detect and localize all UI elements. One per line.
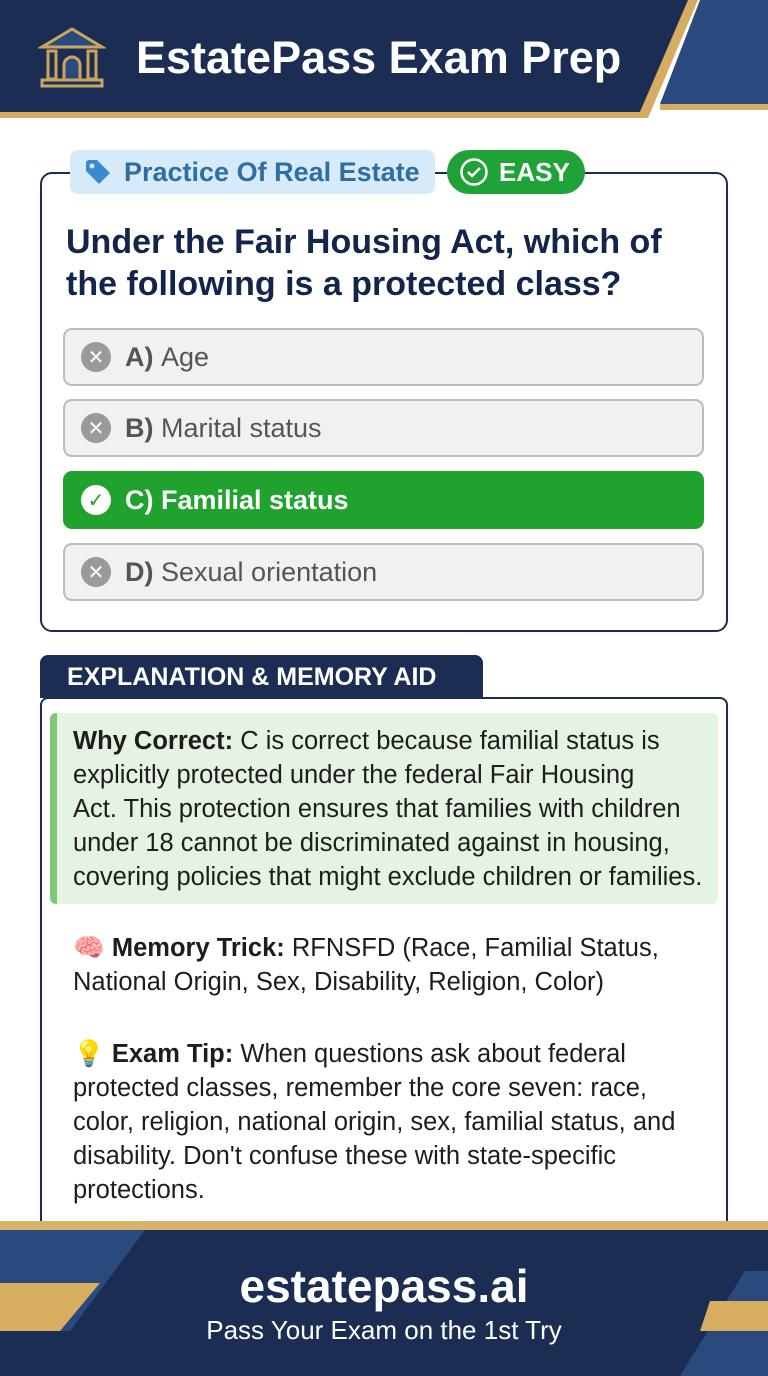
tag: category: Practice Of Real Estate (124, 156, 420, 186)
explanation panel (40, 697, 728, 1237)
why correct box: Why Correct: C is correct because familial status is (73, 727, 660, 755)
footer banner (0, 1221, 768, 1376)
tag: difficulty: EASY (499, 156, 570, 186)
why correct box: covering policies that might exclude children or families. (73, 863, 702, 891)
option A: A) (125, 342, 154, 372)
header banner (0, 0, 768, 118)
footer brand: estatepass.ai (240, 1260, 528, 1312)
exam tip (73, 1039, 675, 1204)
explanation heading tab: EXPLANATION & MEMORY AID (67, 663, 436, 691)
title: EstatePass Exam Prep (136, 32, 621, 83)
option B (63, 399, 704, 457)
why correct box: explicitly protected under the federal Fair Housing (73, 761, 634, 789)
memory trick (73, 934, 659, 996)
option C correct (63, 471, 704, 529)
option A: Age (161, 342, 209, 372)
exam tip: disability. Don't confuse these with state-specific (73, 1142, 616, 1170)
exam tip: 💡 Exam Tip: When questions ask about federal (73, 1040, 626, 1068)
question text: Under the Fair Housing Act, which of the following is a protected class? (66, 223, 662, 303)
question card (40, 172, 728, 632)
tag: difficulty (447, 150, 585, 194)
option D: Sexual orientation (161, 556, 377, 586)
option C correct: ✓ (88, 490, 104, 512)
option D (63, 543, 704, 601)
tag: category (70, 150, 435, 194)
why correct box: under 18 cannot be discriminated against in housing, (73, 829, 670, 857)
option B: B) (125, 412, 154, 442)
memory trick: 🧠 Memory Trick: RFNSFD (Race, Familial Status, (73, 934, 659, 962)
why correct box (50, 713, 718, 904)
explanation heading tab (40, 655, 483, 698)
memory trick: National Origin, Sex, Disability, Religion, Color) (73, 968, 604, 996)
exam tip: color, religion, national origin, sex, familial status, and (73, 1108, 675, 1136)
option D: ✕ (88, 562, 104, 584)
footer tagline: Pass Your Exam on the 1st Try (206, 1315, 562, 1345)
icon: building (38, 27, 106, 88)
option A (63, 328, 704, 386)
exam tip: protected classes, remember the core seven: race, (73, 1074, 647, 1102)
option A: ✕ (88, 346, 104, 368)
exam tip: protections. (73, 1176, 205, 1204)
option C correct: C) Familial status (125, 484, 349, 514)
why correct box: Act. This protection ensures that families with children (73, 795, 681, 823)
option B: ✕ (88, 418, 104, 440)
option D: D) (125, 556, 154, 586)
option B: Marital status (161, 412, 322, 442)
